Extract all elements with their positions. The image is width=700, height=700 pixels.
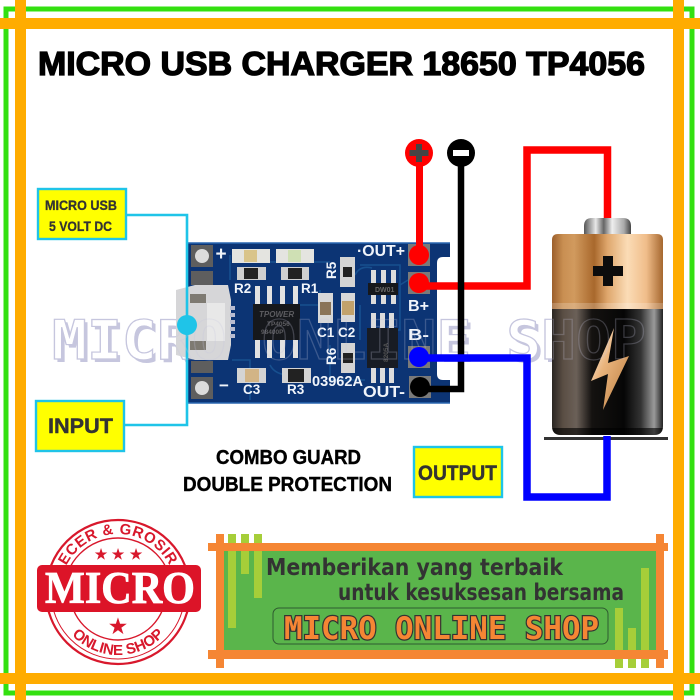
- board silkscreen labels: C3: [243, 382, 261, 397]
- label: micro usb 5 volt dc: MICRO USB: [45, 197, 117, 213]
- label: output: [414, 447, 502, 497]
- label: output: OUTPUT: [418, 462, 497, 485]
- label connector lines: [124, 215, 187, 425]
- left header pads: [191, 245, 213, 399]
- banner shop name: MICRO ONLINE SHOP: [284, 611, 599, 647]
- red wire to plus terminal: [409, 160, 429, 293]
- resistors and capacitors: [237, 257, 355, 383]
- stamp logo: MICRO: [45, 563, 195, 613]
- board silkscreen labels: R3: [287, 382, 305, 397]
- promo banner: [208, 534, 668, 668]
- positive terminal symbol: [405, 139, 433, 167]
- banner orange frame: [208, 534, 668, 668]
- battery plus sign: [593, 256, 623, 286]
- board silkscreen labels: −: [219, 376, 229, 395]
- board silkscreen labels: R6: [324, 347, 339, 365]
- board silkscreen labels: C1: [317, 325, 335, 340]
- banner slogan: untuk kesuksesan bersama: [338, 580, 624, 606]
- 8205A chip: 8205A: [383, 343, 390, 362]
- stamp logo: ★: [109, 616, 127, 638]
- right solder pads: [408, 244, 431, 398]
- blue wire to battery negative: [409, 347, 607, 497]
- DW01 chip: DW01: [375, 287, 395, 294]
- negative terminal symbol: [447, 139, 475, 167]
- DW01 chip: [368, 270, 398, 304]
- stamp logo: [37, 518, 201, 666]
- protection caption: [183, 447, 392, 496]
- banner slogan: [266, 555, 624, 606]
- board silkscreen labels: OUT-: [363, 384, 405, 401]
- protection caption: DOUBLE PROTECTION: [183, 474, 392, 496]
- label: micro usb 5 volt dc: [38, 189, 126, 239]
- label: input: INPUT: [48, 415, 113, 438]
- board traces: [230, 255, 408, 400]
- board silkscreen labels: R2: [234, 281, 251, 296]
- board silkscreen labels: 03962A: [312, 374, 364, 390]
- stamp logo: ★: [95, 546, 108, 562]
- board silkscreen labels: R5: [324, 261, 339, 279]
- cyan connector dot: [177, 315, 197, 335]
- board silkscreen labels: B-: [408, 327, 429, 344]
- TP4056 chip: [253, 286, 300, 358]
- red positive wire to battery: [419, 150, 608, 286]
- black wire to minus terminal: [410, 160, 461, 397]
- micro usb connector: [176, 285, 235, 360]
- TP4056 chip: 98400P: [261, 329, 284, 336]
- title: MICRO USB CHARGER 18650 TP4056: [38, 45, 645, 82]
- board silkscreen labels: [215, 243, 429, 401]
- watermark: MICRO ONLINE SHOP: [55, 312, 649, 375]
- board silkscreen labels: ·OUT+: [357, 243, 405, 260]
- board silkscreen labels: +: [215, 244, 227, 265]
- LEDs: [232, 249, 314, 263]
- board silkscreen labels: C2: [338, 325, 355, 340]
- stamp logo: ★: [130, 546, 143, 562]
- stamp logo: ECER & GROSIR: [58, 524, 177, 565]
- battery: [544, 218, 668, 440]
- battery lightning bolt: [591, 328, 629, 410]
- TP4056 chip: TP4056: [267, 321, 290, 328]
- label: input: [36, 401, 124, 451]
- protection caption: COMBO GUARD: [216, 447, 361, 469]
- banner light green stripes: [228, 534, 649, 668]
- watermark: MICRO ONLINE SHOP: [52, 309, 646, 372]
- board silkscreen labels: R1: [301, 281, 319, 296]
- banner slogan: Memberikan yang terbaik: [266, 555, 564, 581]
- 8205A chip: [367, 313, 398, 383]
- board silkscreen labels: B+: [408, 298, 429, 315]
- faint watermark over artwork: MICRO ONLINE SHOP: [52, 309, 646, 372]
- TP4056 chip: TPOWER: [259, 310, 294, 319]
- label: micro usb 5 volt dc: 5 VOLT DC: [49, 218, 112, 234]
- circuit board: [176, 243, 450, 403]
- stamp logo: ONLINE SHOP: [74, 629, 160, 655]
- stamp logo: ★: [112, 546, 125, 562]
